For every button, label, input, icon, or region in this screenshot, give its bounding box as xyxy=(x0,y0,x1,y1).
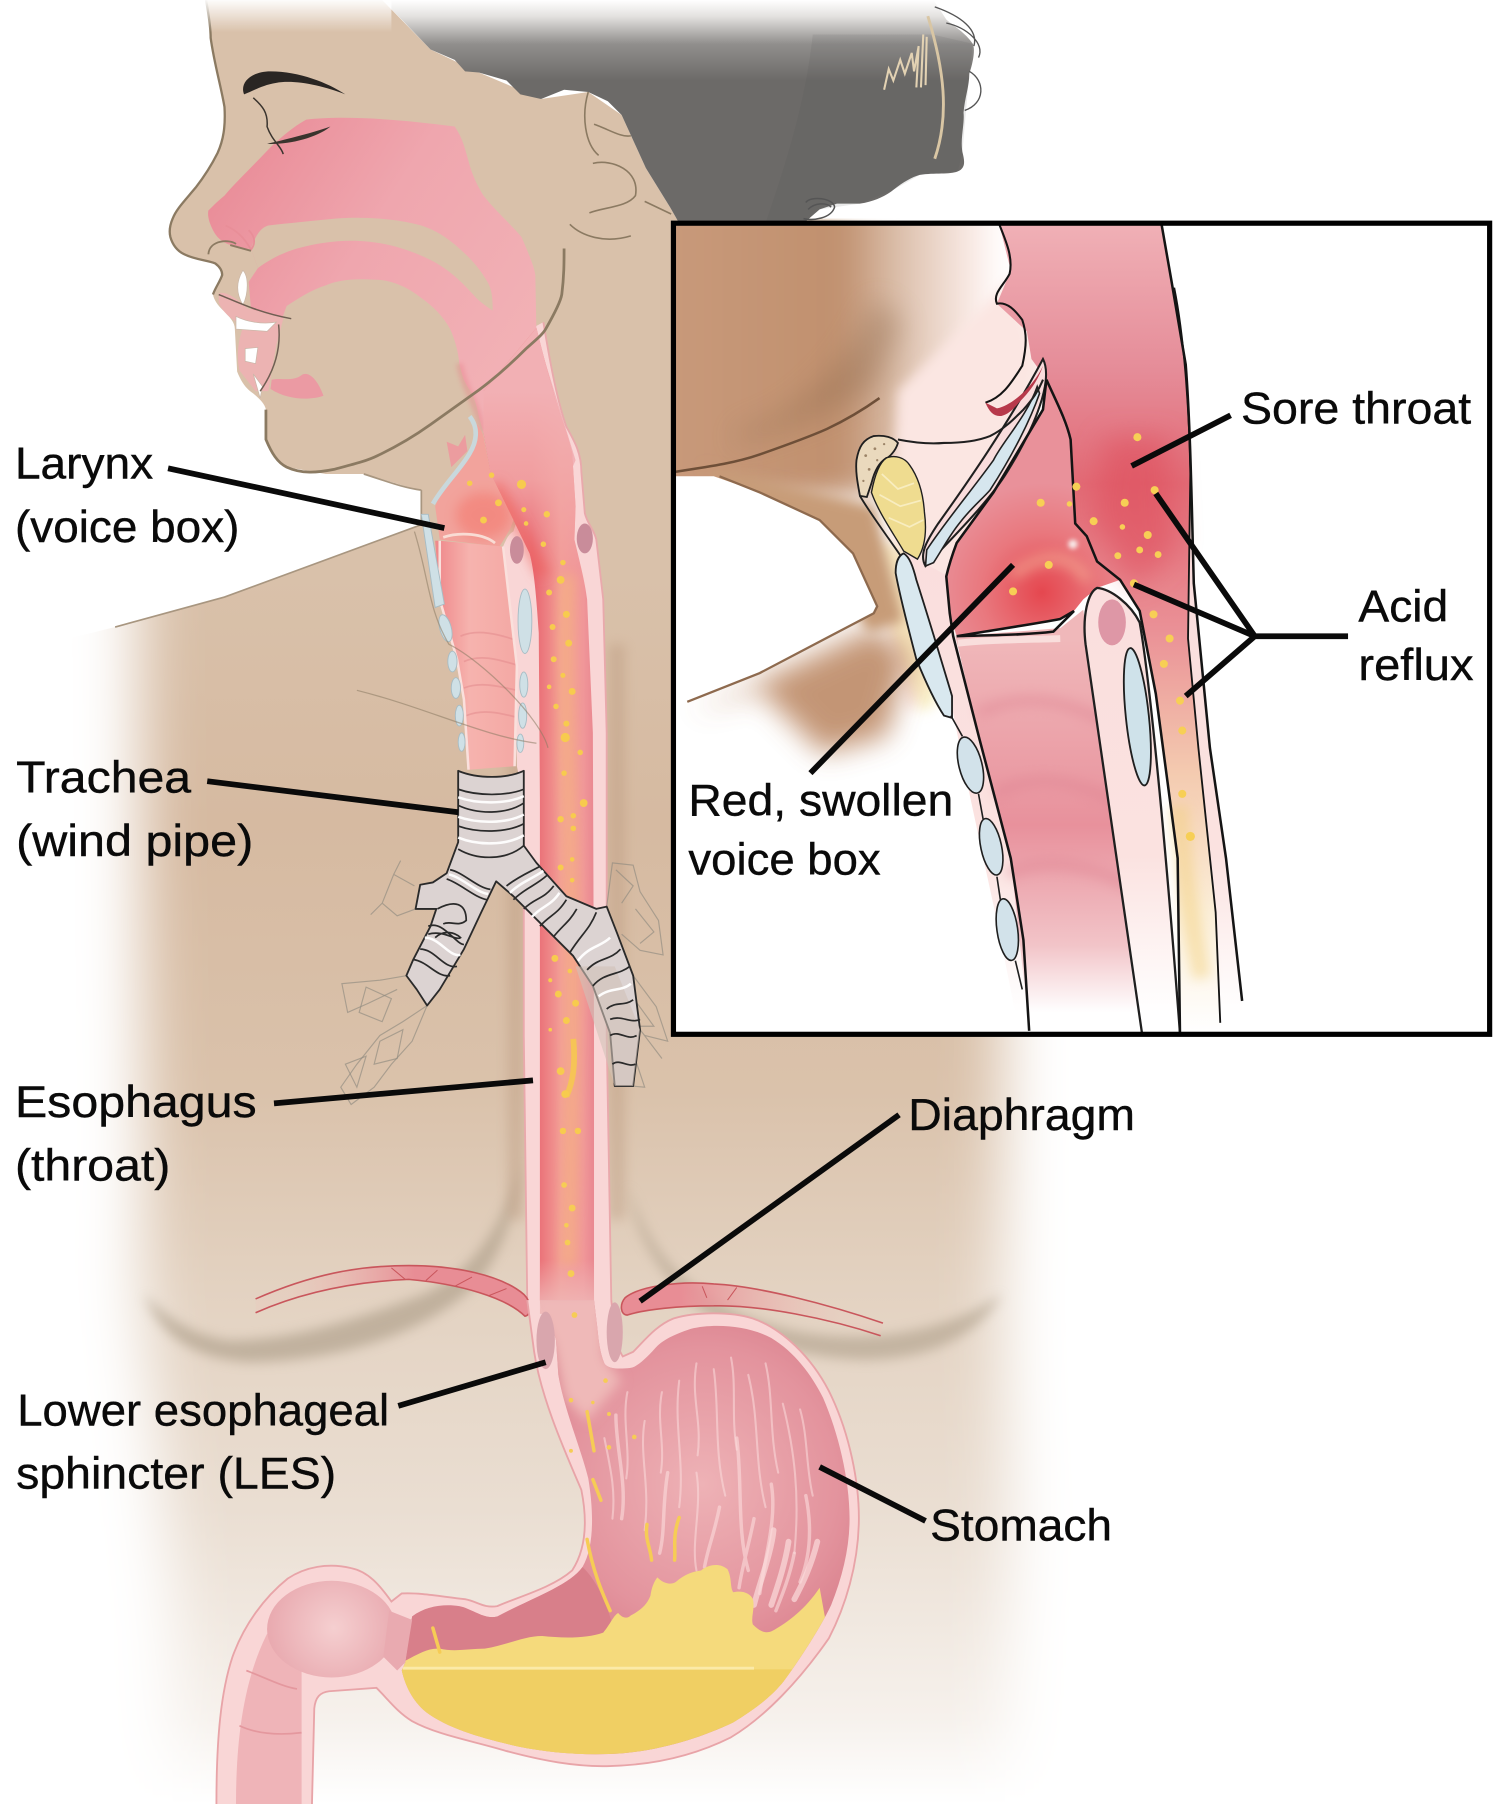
inset: jaw and neck lines xyxy=(676,398,880,472)
inset: larynx xyxy=(946,380,1120,636)
esophagus to stomach blend xyxy=(540,1260,594,1314)
trachea interior xyxy=(357,514,548,770)
inset: pale pink strip beside trachea xyxy=(905,553,1022,972)
pylorus and duodenum xyxy=(236,1581,412,1804)
rib shadow left xyxy=(144,1162,521,1362)
back wall strip xyxy=(503,322,611,1306)
muscle oval xyxy=(577,523,593,553)
hair xyxy=(382,0,981,223)
shadow beside esophagus xyxy=(516,644,617,1220)
faint distal branches xyxy=(341,861,668,1104)
inset panel xyxy=(645,196,1490,1034)
sphincter muscles xyxy=(536,1302,623,1369)
label: esophagus: (throat) xyxy=(15,1139,170,1190)
bronchi xyxy=(341,771,668,1104)
inset frame xyxy=(673,223,1490,1034)
inset: epiglottis and cartilage xyxy=(923,359,1046,566)
inset: trachea wall with cartilage xyxy=(1086,589,1174,972)
larynx xyxy=(433,416,513,555)
label: trachea: (wind pipe) xyxy=(16,815,253,866)
tongue spot xyxy=(271,374,323,399)
label: larynx: Larynx xyxy=(15,438,153,489)
diaphragm xyxy=(256,1266,883,1336)
inset: tracheal rings xyxy=(896,553,952,718)
label: trachea: Trachea xyxy=(16,752,191,803)
icon: hair strands xyxy=(804,7,981,219)
label: esophagus: Esophagus xyxy=(15,1076,257,1127)
cartilage rings xyxy=(421,514,532,752)
inset: trachea xyxy=(955,610,1142,1033)
acid droplets in throat and esophagus xyxy=(467,472,588,1134)
lips and teeth xyxy=(219,270,291,398)
inset: mouth tissue edge xyxy=(985,366,1043,416)
inset: pale tissue behind larynx xyxy=(886,276,1042,713)
label: diaphragm: Diaphragm xyxy=(908,1089,1135,1140)
inset: acid droplets xyxy=(1009,433,1195,841)
inset: hyoid bone xyxy=(856,436,898,497)
stomach acid xyxy=(402,1565,825,1754)
torso skin xyxy=(101,218,1040,1768)
inset: thyroid cartilage xyxy=(871,457,925,559)
label: stomach: Stomach xyxy=(930,1500,1112,1551)
rib shadow right xyxy=(627,1185,1002,1360)
hard palate xyxy=(251,218,493,311)
label: acid reflux: Acid xyxy=(1358,580,1448,631)
stomach folds xyxy=(604,1358,817,1611)
eyebrow and eye xyxy=(243,71,345,154)
label: acid reflux: reflux xyxy=(1358,639,1474,690)
stomach lumen xyxy=(397,1260,850,1754)
head and neck xyxy=(170,0,691,575)
inset: clear space under jaw xyxy=(676,476,876,690)
leader lines xyxy=(168,415,1348,1521)
esophagus xyxy=(484,328,594,1300)
top fade xyxy=(196,0,391,32)
label: lower esophageal sphincter: sphincter (LES) xyxy=(16,1448,336,1499)
ear xyxy=(570,92,671,239)
face outline xyxy=(115,0,671,627)
inset: chin skin xyxy=(676,226,994,510)
label: sore throat: Sore throat xyxy=(1241,382,1472,433)
label: lower esophageal sphincter: Lower esophageal xyxy=(17,1384,389,1435)
label: larynx: (voice box) xyxy=(15,501,239,552)
label: red, swollen voice box: voice box xyxy=(688,833,881,884)
nasal cavity and throat xyxy=(208,118,576,541)
inset: outline strokes xyxy=(946,224,1242,1033)
acid streaks xyxy=(433,1182,679,1652)
label: red, swollen voice box: Red, swollen xyxy=(688,775,953,826)
inset: neck shadow xyxy=(691,627,909,754)
inset: pharynx lumen xyxy=(997,224,1220,1033)
stomach outer wall xyxy=(216,1300,859,1804)
